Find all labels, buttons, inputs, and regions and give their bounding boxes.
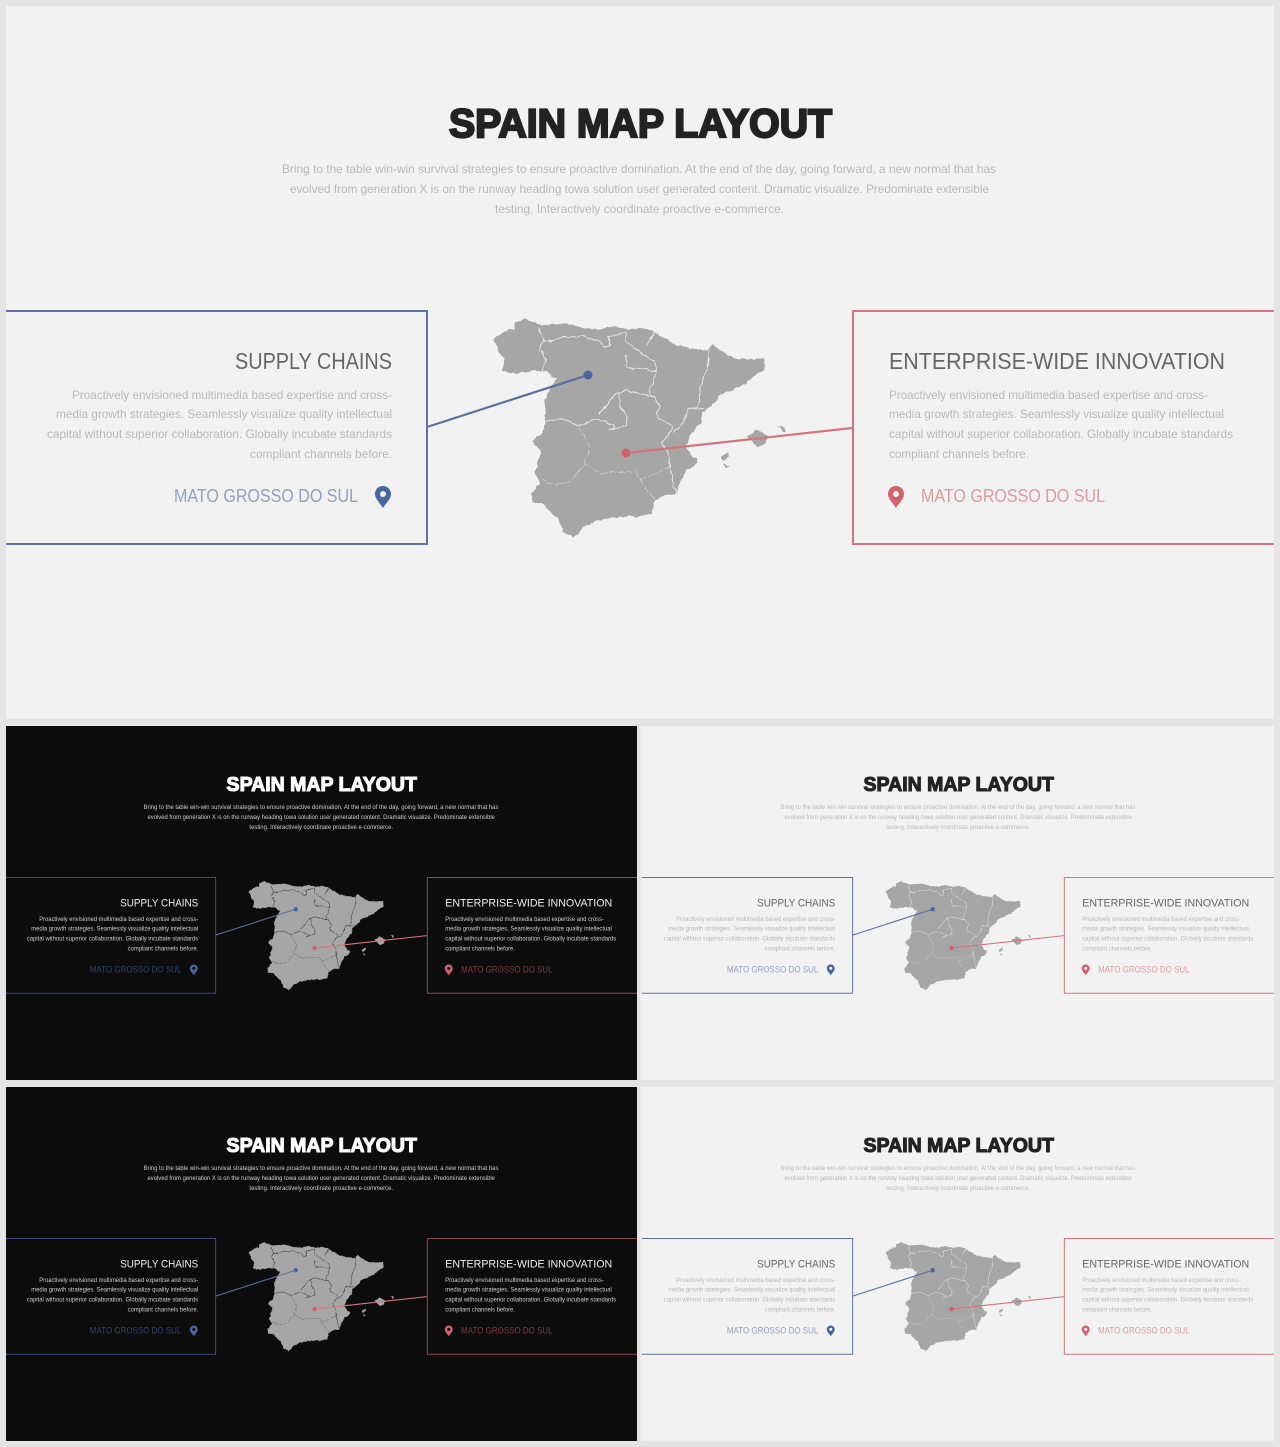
- icon: red pin: [1082, 964, 1090, 975]
- panel: supply chains: compliant channels before.: [250, 447, 392, 461]
- panel: enterprise-wide innovation: MATO GROSSO DO SUL: [461, 964, 553, 974]
- title: SPAIN MAP LAYOUT: [227, 774, 417, 796]
- connector: red: [622, 428, 852, 458]
- intro text: evolved from generation X is on the runway heading towa solution user generated content. Dramatic visualize. Predominate extensible: [290, 182, 989, 196]
- icon: red pin: [888, 486, 904, 508]
- intro text: [781, 805, 1135, 831]
- panel: supply chains: compliant channels before.: [765, 947, 836, 953]
- title: SPAIN MAP LAYOUT: [864, 1135, 1054, 1157]
- panel: supply chains: Proactively envisioned multimedia based expertise and cross-: [39, 917, 198, 923]
- panel: small light slide, row 1: [640, 723, 1277, 1083]
- panel: enterprise-wide innovation: Proactively envisioned multimedia based expertise and cross-: [445, 917, 604, 923]
- intro text: testing. Interactively coordinate proactive e-commerce.: [886, 1186, 1030, 1192]
- intro text: evolved from generation X is on the runway heading towa solution user generated content. Dramatic visualize. Predominate extensible: [785, 815, 1133, 821]
- panel: enterprise-wide innovation: media growth strategies. Seamlessly visualize quality intellectual: [1082, 927, 1249, 933]
- panel: enterprise-wide innovation: Proactively envisioned multimedia based expertise and cross-: [1082, 917, 1241, 923]
- intro text: evolved from generation X is on the runway heading towa solution user generated content. Dramatic visualize. Predominate extensible: [148, 815, 496, 821]
- connector: blue: [853, 1268, 935, 1296]
- intro text: [781, 1166, 1135, 1192]
- title: SPAIN MAP LAYOUT: [864, 774, 1054, 796]
- panel: enterprise-wide innovation: Proactively envisioned multimedia based expertise and cross-: [1082, 1278, 1241, 1284]
- panel: enterprise-wide innovation: [427, 877, 638, 993]
- icon: red pin: [445, 1325, 453, 1336]
- panel: supply chains: SUPPLY CHAINS: [120, 1258, 199, 1270]
- panel: supply chains: media growth strategies. Seamlessly visualize quality intellectual: [668, 927, 835, 933]
- panel: small light slide, row 2: [640, 1084, 1277, 1444]
- panel: supply chains: Proactively envisioned multimedia based expertise and cross-: [72, 388, 392, 402]
- panel: enterprise-wide innovation: ENTERPRISE-WIDE INNOVATION: [1082, 897, 1249, 909]
- panel: supply chains: [642, 1238, 853, 1354]
- title: SPAIN MAP LAYOUT: [227, 1135, 417, 1157]
- panel: enterprise-wide innovation: compliant channels before.: [445, 947, 515, 953]
- panel: enterprise-wide innovation: media growth strategies. Seamlessly visualize quality intellectual: [1082, 1288, 1249, 1294]
- panel: supply chains: media growth strategies. Seamlessly visualize quality intellectual: [31, 927, 198, 933]
- panel: large light slide: [0, 0, 1280, 725]
- panel: supply chains: media growth strategies. Seamlessly visualize quality intellectual: [56, 407, 392, 421]
- panel: supply chains: SUPPLY CHAINS: [757, 1258, 836, 1270]
- map of Spain: [249, 881, 395, 990]
- panel: supply chains: MATO GROSSO DO SUL: [727, 1325, 818, 1335]
- panel: supply chains: capital without superior collaboration. Globally incubate standards: [664, 1298, 835, 1304]
- panel: small dark slide, row 2: [3, 1084, 640, 1444]
- intro text: [144, 805, 498, 831]
- connector: blue: [216, 1268, 298, 1296]
- panel: enterprise-wide innovation: Proactively envisioned multimedia based expertise and cross-: [889, 388, 1208, 402]
- intro text: Bring to the table win-win survival strategies to ensure proactive domination. At the end of the day, going forward, a new normal that has: [144, 805, 498, 811]
- intro text: Bring to the table win-win survival strategies to ensure proactive domination. At the end of the day, going forward, a new normal that has: [144, 1166, 498, 1172]
- intro text: Bring to the table win-win survival strategies to ensure proactive domination. At the end of the day, going forward, a new normal that has: [781, 805, 1135, 811]
- map of Spain: [886, 1242, 1032, 1351]
- panel: supply chains: MATO GROSSO DO SUL: [174, 486, 358, 506]
- panel: enterprise-wide innovation: MATO GROSSO DO SUL: [1098, 1325, 1190, 1335]
- panel: supply chains: [642, 877, 853, 993]
- intro text: testing. Interactively coordinate proactive e-commerce.: [249, 825, 393, 831]
- panel: enterprise-wide innovation: compliant channels before.: [445, 1308, 515, 1314]
- connector: red: [949, 1297, 1064, 1311]
- connector: blue: [427, 370, 592, 427]
- panel: supply chains: Proactively envisioned multimedia based expertise and cross-: [676, 1278, 835, 1284]
- panel: enterprise-wide innovation: [853, 311, 1277, 544]
- icon: blue pin: [190, 1325, 198, 1336]
- intro text: evolved from generation X is on the runway heading towa solution user generated content. Dramatic visualize. Predominate extensible: [785, 1176, 1133, 1182]
- panel: supply chains: SUPPLY CHAINS: [757, 897, 836, 909]
- icon: blue pin: [190, 964, 198, 975]
- panel: supply chains: Proactively envisioned multimedia based expertise and cross-: [676, 917, 835, 923]
- panel: supply chains: [5, 877, 216, 993]
- connector: red: [312, 936, 427, 950]
- panel: supply chains: capital without superior collaboration. Globally incubate standards: [27, 1298, 198, 1304]
- panel: supply chains: compliant channels before.: [128, 947, 199, 953]
- map of Spain: [886, 881, 1032, 990]
- intro text: [282, 162, 996, 216]
- panel: supply chains: media growth strategies. Seamlessly visualize quality intellectual: [31, 1288, 198, 1294]
- connector: red: [949, 936, 1064, 950]
- panel: supply chains: Proactively envisioned multimedia based expertise and cross-: [39, 1278, 198, 1284]
- panel: enterprise-wide innovation: capital without superior collaboration. Globally incubate standards: [889, 427, 1233, 441]
- connector: red: [312, 1297, 427, 1311]
- intro text: [144, 1166, 498, 1192]
- panel: enterprise-wide innovation: capital without superior collaboration. Globally incubate standards: [445, 937, 616, 943]
- panel: enterprise-wide innovation: media growth strategies. Seamlessly visualize quality intellectual: [445, 927, 612, 933]
- panel: enterprise-wide innovation: capital without superior collaboration. Globally incubate standards: [445, 1298, 616, 1304]
- panel: enterprise-wide innovation: MATO GROSSO DO SUL: [921, 486, 1105, 506]
- map of Spain: [493, 318, 787, 537]
- panel: enterprise-wide innovation: Proactively envisioned multimedia based expertise and cross-: [445, 1278, 604, 1284]
- title: SPAIN MAP LAYOUT: [449, 102, 832, 146]
- icon: red pin: [445, 964, 453, 975]
- intro text: evolved from generation X is on the runway heading towa solution user generated content. Dramatic visualize. Predominate extensible: [148, 1176, 496, 1182]
- panel: supply chains: MATO GROSSO DO SUL: [90, 964, 181, 974]
- icon: blue pin: [375, 486, 391, 508]
- icon: red pin: [1082, 1325, 1090, 1336]
- icon: blue pin: [827, 964, 835, 975]
- map of Spain: [249, 1242, 395, 1351]
- panel: enterprise-wide innovation: ENTERPRISE-WIDE INNOVATION: [889, 348, 1225, 374]
- panel: enterprise-wide innovation: media growth strategies. Seamlessly visualize quality intellectual: [445, 1288, 612, 1294]
- connector: blue: [216, 907, 298, 935]
- intro text: testing. Interactively coordinate proactive e-commerce.: [249, 1186, 393, 1192]
- panel: supply chains: media growth strategies. Seamlessly visualize quality intellectual: [668, 1288, 835, 1294]
- panel: enterprise-wide innovation: compliant channels before.: [1082, 947, 1152, 953]
- panel: supply chains: SUPPLY CHAINS: [120, 897, 199, 909]
- connector: blue: [853, 907, 935, 935]
- panel: enterprise-wide innovation: MATO GROSSO DO SUL: [1098, 964, 1190, 974]
- panel: enterprise-wide innovation: [1064, 1238, 1275, 1354]
- intro text: Bring to the table win-win survival strategies to ensure proactive domination. At the end of the day, going forward, a new normal that has: [781, 1166, 1135, 1172]
- panel: supply chains: compliant channels before.: [128, 1308, 199, 1314]
- panel: enterprise-wide innovation: ENTERPRISE-WIDE INNOVATION: [445, 1258, 612, 1270]
- panel: enterprise-wide innovation: ENTERPRISE-WIDE INNOVATION: [445, 897, 612, 909]
- panel: enterprise-wide innovation: ENTERPRISE-WIDE INNOVATION: [1082, 1258, 1249, 1270]
- intro text: Bring to the table win-win survival strategies to ensure proactive domination. At the end of the day, going forward, a new normal that has: [282, 162, 996, 176]
- panel: enterprise-wide innovation: capital without superior collaboration. Globally incubate standards: [1082, 1298, 1253, 1304]
- intro text: testing. Interactively coordinate proactive e-commerce.: [495, 202, 784, 216]
- panel: supply chains: SUPPLY CHAINS: [235, 348, 392, 374]
- panel: enterprise-wide innovation: compliant channels before.: [1082, 1308, 1152, 1314]
- icon: blue pin: [827, 1325, 835, 1336]
- panel: supply chains: capital without superior collaboration. Globally incubate standards: [664, 937, 835, 943]
- panel: supply chains: capital without superior collaboration. Globally incubate standards: [27, 937, 198, 943]
- panel: supply chains: [3, 311, 427, 544]
- panel: enterprise-wide innovation: media growth strategies. Seamlessly visualize quality intellectual: [889, 407, 1224, 421]
- panel: small dark slide, row 1: [3, 723, 640, 1083]
- panel: supply chains: [5, 1238, 216, 1354]
- panel: enterprise-wide innovation: MATO GROSSO DO SUL: [461, 1325, 553, 1335]
- panel: supply chains: MATO GROSSO DO SUL: [90, 1325, 181, 1335]
- panel: enterprise-wide innovation: capital without superior collaboration. Globally incubate standards: [1082, 937, 1253, 943]
- intro text: testing. Interactively coordinate proactive e-commerce.: [886, 825, 1030, 831]
- panel: supply chains: capital without superior collaboration. Globally incubate standards: [47, 427, 392, 441]
- panel: supply chains: MATO GROSSO DO SUL: [727, 964, 818, 974]
- panel: enterprise-wide innovation: [1064, 877, 1275, 993]
- panel: supply chains: compliant channels before.: [765, 1308, 836, 1314]
- panel: enterprise-wide innovation: compliant channels before.: [889, 447, 1029, 461]
- panel: enterprise-wide innovation: [427, 1238, 638, 1354]
